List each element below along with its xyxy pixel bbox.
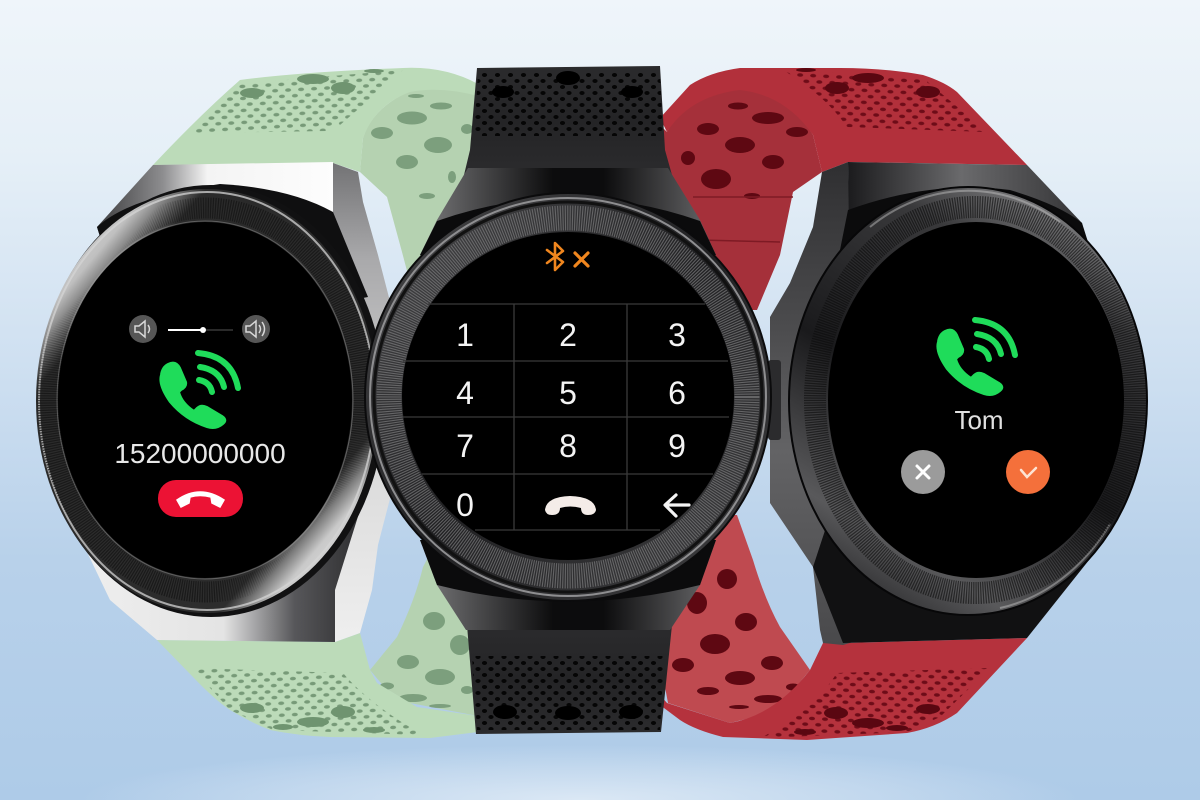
icon: bluetooth off (547, 243, 588, 270)
floor reflection (80, 690, 1080, 800)
right case side piece (770, 162, 860, 645)
green strap large holes front top (240, 69, 384, 98)
right screen (828, 222, 1124, 578)
left bezel outer ring (36, 189, 378, 613)
red hang-up button (158, 480, 243, 517)
center case collar top (420, 168, 716, 255)
red strap inner face bottom (660, 515, 810, 723)
dial pad grid (403, 304, 729, 530)
icon: backspace arrow (665, 495, 689, 516)
left case bottom silver (87, 510, 360, 642)
red strap large holes inner top (681, 102, 808, 199)
dial pad digits: 8 (559, 428, 577, 464)
volume slider (168, 327, 233, 333)
left bezel knurled ring (48, 208, 364, 592)
dial pad digits: 3 (668, 317, 686, 353)
dial pad digits (456, 317, 686, 523)
red strap front bottom (660, 638, 1027, 740)
volume high icon (242, 315, 270, 343)
center watch black (365, 66, 771, 734)
right bezel outer ring (789, 187, 1147, 615)
right crown (768, 360, 781, 440)
red strap (660, 68, 1027, 740)
center case collar bottom (420, 540, 716, 630)
right watch black case (768, 162, 1147, 645)
center lug shoulders bottom (420, 540, 716, 602)
black strap large holes (492, 71, 643, 720)
red strap perforation top (783, 70, 987, 132)
right bezel knurled ring (815, 207, 1135, 593)
dial pad digits: 1 (456, 317, 474, 353)
green strap inner face top (360, 84, 478, 320)
green strap large holes front bottom (240, 703, 385, 733)
black strap bottom (467, 625, 672, 734)
red strap inner face top (660, 84, 822, 310)
icon: dial handset (545, 496, 596, 515)
dial pad digits: 5 (559, 375, 577, 411)
red strap large holes front bottom (794, 704, 940, 735)
dial pad digits: 9 (668, 428, 686, 464)
accept button (1006, 450, 1050, 494)
green strap front top (153, 68, 478, 172)
left watch silver case (36, 162, 400, 642)
red strap inner seam (693, 197, 793, 242)
black strap top (464, 66, 672, 175)
green strap (153, 68, 478, 738)
green strap inner face bottom (370, 525, 478, 716)
dial pad digits: 7 (456, 428, 474, 464)
green strap large holes inner top (371, 94, 473, 199)
center bezel knurled ring (389, 218, 747, 576)
dial pad digits: 2 (559, 317, 577, 353)
center bezel (365, 193, 771, 601)
icon: green call (160, 353, 238, 428)
icon: green incoming call (937, 320, 1015, 395)
left lug dark top (97, 184, 368, 310)
green strap large holes inner bottom (380, 612, 473, 708)
phone number: 15200000000 (114, 438, 286, 469)
left screen (58, 222, 352, 578)
black strap perforation bottom (472, 656, 664, 730)
left case top silver (97, 162, 360, 300)
caller name: Tom (954, 405, 1004, 435)
right case top cap (848, 162, 1100, 300)
green strap perforation top (193, 70, 403, 133)
left case side piece (320, 163, 400, 642)
volume low icon (129, 315, 157, 343)
green strap front bottom (157, 633, 478, 738)
left bezel bright rim (39, 192, 375, 610)
red strap large holes inner bottom (672, 569, 800, 709)
center bezel bright rim (370, 198, 766, 596)
green strap perforation bottom (192, 668, 423, 735)
red strap large holes front top (796, 68, 940, 98)
right lug dark top (830, 188, 1100, 300)
dial pad digits: 0 (456, 487, 474, 523)
center bezel dark groove (374, 202, 762, 592)
left case dark under-ring (37, 185, 385, 617)
red strap perforation bottom (760, 668, 990, 738)
right case bottom cap (813, 500, 1110, 643)
center screen (402, 232, 734, 560)
dial pad digits: 4 (456, 375, 474, 411)
decline button (901, 450, 945, 494)
dial pad digits: 6 (668, 375, 686, 411)
red strap front top (660, 68, 1027, 172)
center lug shoulders top (420, 198, 716, 255)
right bezel top highlight (870, 191, 1110, 608)
black strap perforation top (474, 72, 663, 136)
left screen inner edge (57, 221, 353, 579)
